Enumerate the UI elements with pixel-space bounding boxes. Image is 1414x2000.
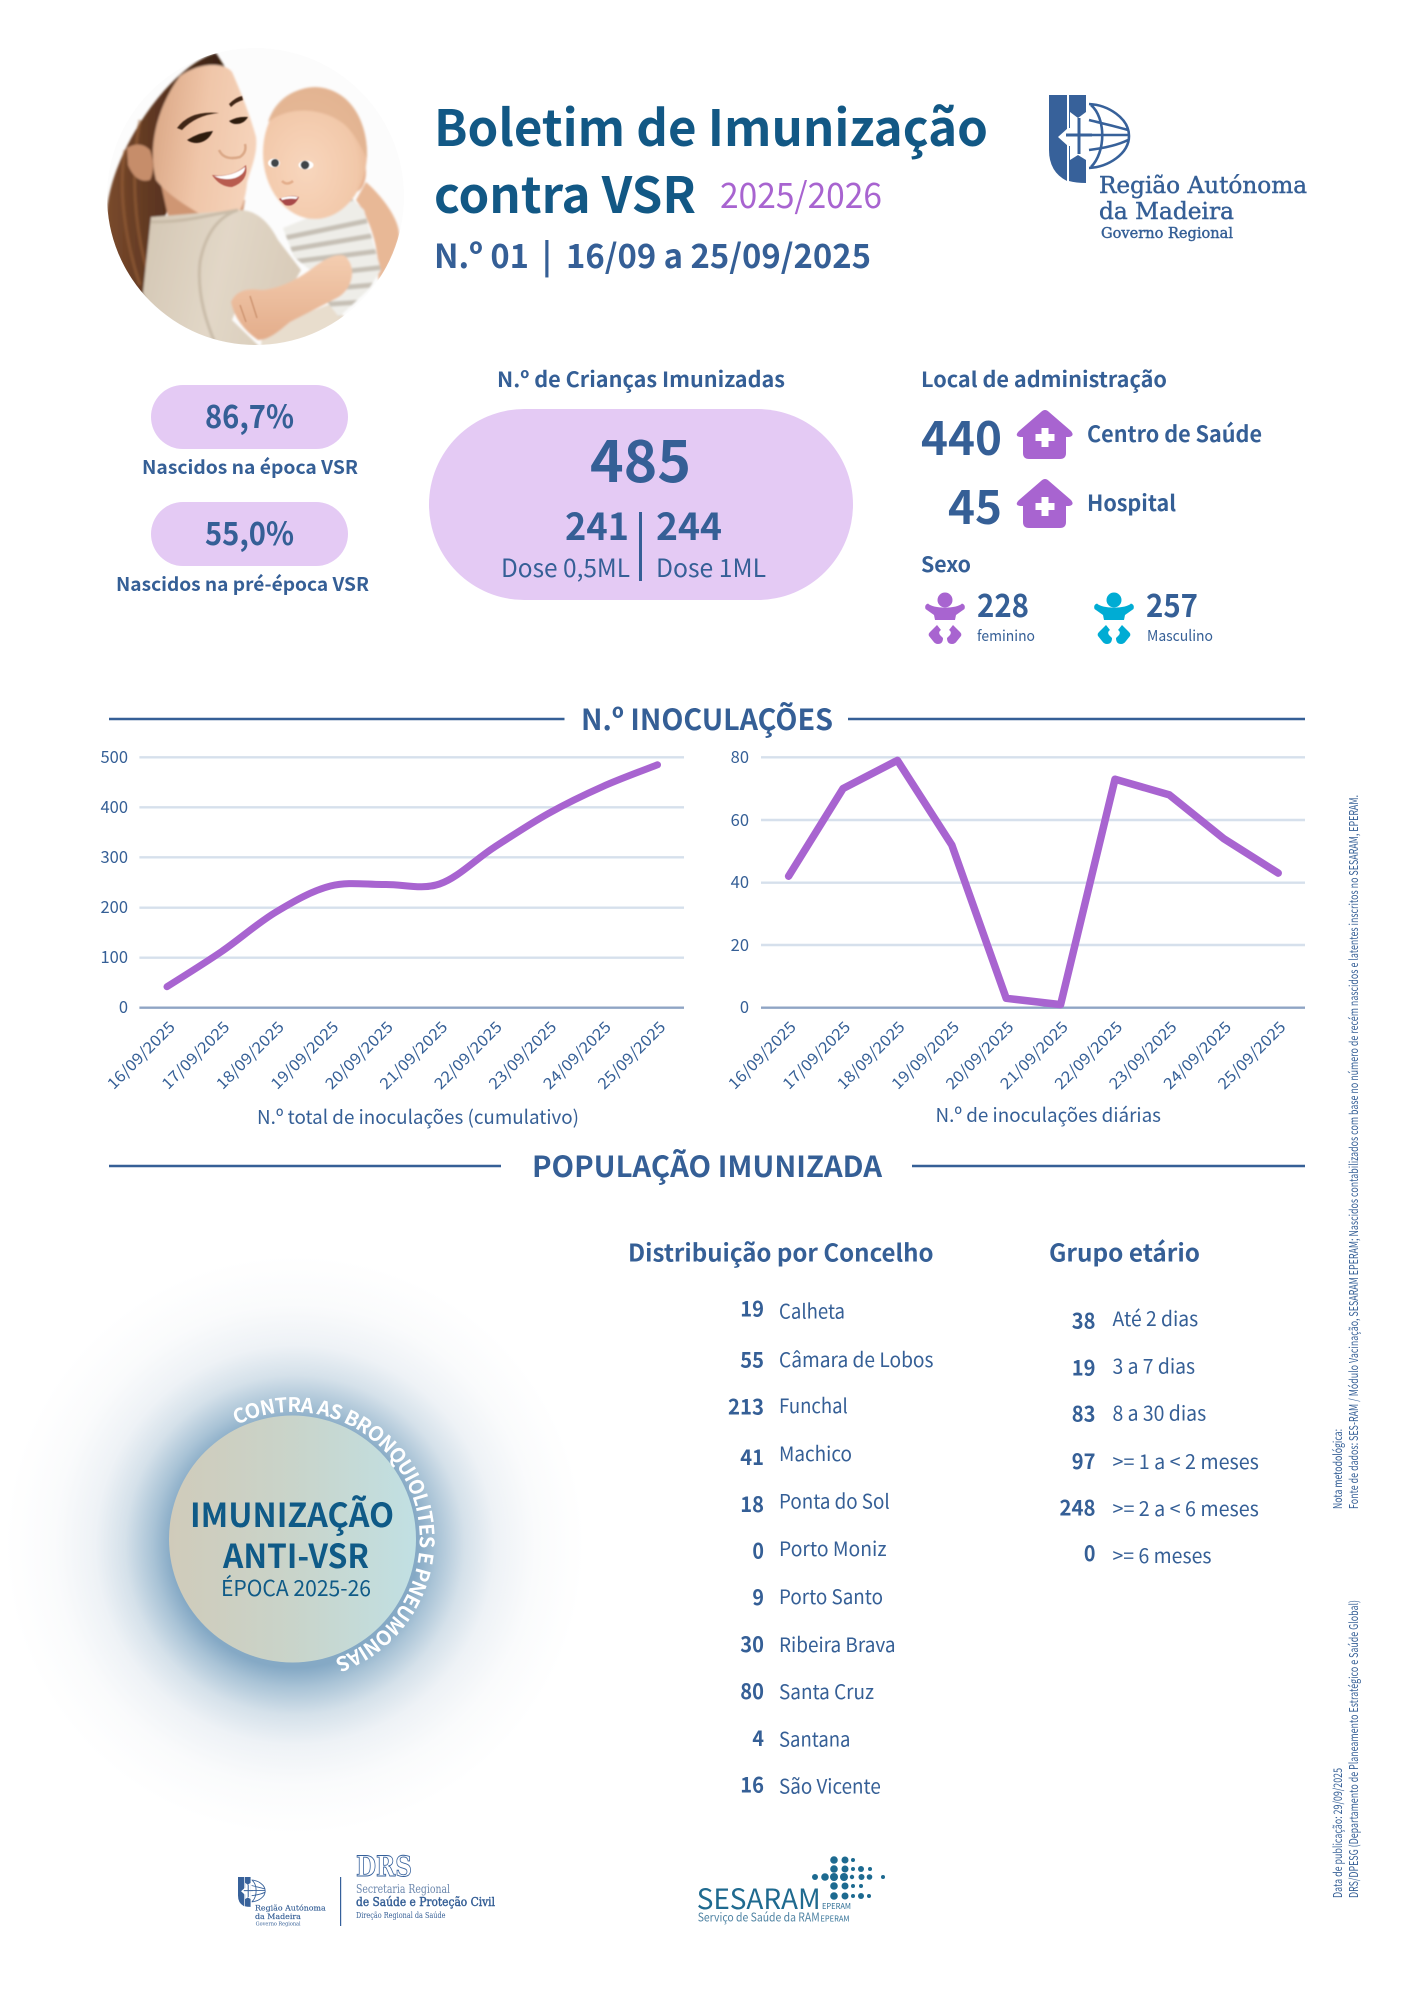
line chart: diárias: 60 [731, 807, 749, 831]
side note: publicação: DRS/DPESG (Departamento de Planeamento Estratégico e Saúde Global) [1345, 1600, 1362, 1898]
icon: centro de saúde [1017, 410, 1073, 459]
line chart: cumulativo: 20/09/2025 [320, 1016, 398, 1094]
panel: local de administração: 45 [948, 469, 1002, 538]
line chart: diárias: 20 [731, 932, 749, 956]
logo: Região Autónoma da Madeira [1049, 95, 1307, 242]
line chart: cumulativo: 200 [101, 894, 128, 918]
line chart: cumulativo: 22/09/2025 [429, 1016, 507, 1094]
footer logo: SESARAM: Serviço de Saúde da RAM [698, 1909, 820, 1926]
panel: distribuição por concelho: 30 [740, 1628, 764, 1659]
badge: imunização anti-VSR: CONTRA AS BRONQUIOLITES E PNEUMONIAS [234, 1397, 435, 1672]
panel: distribuição por concelho: Machico [779, 1438, 852, 1467]
panel: grupo etário: 38 [1072, 1305, 1096, 1336]
badge: imunização anti-VSR: ANTI-VSR [222, 1530, 369, 1578]
panel: sexo [921, 549, 1213, 646]
stat: nascidos na época VSR: 86,7% [205, 392, 294, 438]
line chart: cumulativo: 0 [119, 994, 128, 1018]
line chart: diárias: 80 [731, 744, 749, 768]
icon: bebé masculino [1094, 592, 1134, 644]
line chart: diárias: 20/09/2025 [940, 1016, 1018, 1094]
line chart: cumulativo: 25/09/2025 [592, 1016, 670, 1094]
icon: hospital [1017, 479, 1073, 528]
line chart: diárias: 19/09/2025 [886, 1016, 964, 1094]
line chart: diárias: 40 [731, 869, 749, 893]
panel: grupo etário: >= 1 a < 2 meses [1112, 1446, 1259, 1475]
mother and baby face details [177, 96, 314, 322]
title: | [542, 230, 552, 278]
panel: sexo: Sexo [921, 549, 971, 579]
panel: distribuição por concelho: 55 [740, 1344, 764, 1374]
panel: distribuição por concelho: São Vicente [779, 1770, 881, 1799]
panel: sexo: 257 [1146, 581, 1198, 627]
panel: sexo: Masculino [1147, 625, 1213, 646]
panel: distribuição por concelho: Santa Cruz [779, 1676, 874, 1705]
footer logo: DRS Secretaria Regional [340, 1850, 495, 1926]
footer logo: DRS Secretaria Regional: de Saúde e Proteção Civil [356, 1895, 495, 1909]
panel: distribuição por concelho: 4 [752, 1722, 764, 1753]
panel: distribuição por concelho: Câmara de Lobos [779, 1344, 934, 1373]
panel: distribuição por concelho [628, 1234, 934, 1800]
title: 16/09 a 25/09/2025 [566, 230, 871, 278]
line chart: cumulativo: 300 [101, 844, 128, 868]
panel: distribuição por concelho: 213 [728, 1390, 764, 1422]
panel: local de administração: Hospital [1087, 486, 1176, 518]
line chart: diárias: 17/09/2025 [777, 1016, 855, 1094]
panel: grupo etário: >= 2 a < 6 meses [1112, 1493, 1259, 1522]
panel: grupo etário: 3 a 7 dias [1112, 1350, 1195, 1379]
heading: N.º inoculações: N.º INOCULAÇÕES [581, 697, 833, 739]
footer logo: SESARAM: EPERAM [820, 1914, 850, 1925]
panel: distribuição por concelho: 80 [740, 1675, 764, 1706]
line chart: cumulativo: 24/09/2025 [538, 1016, 616, 1094]
line chart: cumulativo: 17/09/2025 [156, 1016, 234, 1094]
panel: grupo etário: 0 [1084, 1537, 1096, 1568]
panel: crianças imunizadas: 244 [656, 496, 722, 551]
line chart: diárias: 21/09/2025 [995, 1016, 1073, 1094]
title: N.º 01 [434, 230, 529, 278]
line chart: diárias: N.º de inoculações diárias [936, 1101, 1161, 1128]
title [434, 89, 988, 278]
panel: distribuição por concelho: Porto Santo [779, 1581, 883, 1610]
panel: grupo etário: Grupo etário [1049, 1234, 1200, 1268]
line chart: diárias: 24/09/2025 [1158, 1016, 1236, 1094]
footer logo: SESARAM: SESARAM [697, 1878, 821, 1918]
panel: distribuição por concelho: Funchal [779, 1390, 848, 1419]
badge: imunização anti-VSR: IMUNIZAÇÃO [190, 1489, 394, 1537]
panel: local de administração [921, 364, 1262, 538]
line chart: cumulativo: 19/09/2025 [265, 1016, 343, 1094]
line chart: diárias: 22/09/2025 [1049, 1016, 1127, 1094]
line chart: diárias [723, 744, 1305, 1128]
panel: local de administração: 440 [921, 400, 1002, 469]
stat: nascidos na pré-época VSR [116, 502, 369, 597]
panel: crianças imunizadas: Dose 0,5ML [501, 549, 630, 585]
side note: publicação: Data de publicação: 29/09/2025 [1329, 1768, 1346, 1898]
footer logo: SESARAM [697, 1856, 885, 1926]
panel: sexo: 228 [977, 581, 1029, 627]
panel: sexo: feminino [977, 625, 1035, 646]
panel: distribuição por concelho: Ponta do Sol [779, 1486, 890, 1515]
line chart: diárias: 16/09/2025 [723, 1016, 801, 1094]
line chart: cumulativo: 100 [101, 944, 128, 968]
panel: distribuição por concelho: Ribeira Brava [779, 1629, 896, 1658]
panel: crianças imunizadas: 241 [565, 496, 629, 551]
panel: grupo etário: 19 [1072, 1351, 1096, 1382]
line chart: diárias: 25/09/2025 [1212, 1016, 1290, 1094]
line chart: cumulativo: 21/09/2025 [374, 1016, 452, 1094]
line chart: cumulativo: 500 [101, 744, 128, 768]
panel: distribuição por concelho: Porto Moniz [779, 1533, 886, 1562]
panel: distribuição por concelho: 16 [740, 1768, 764, 1800]
footer logo: Região Autónoma da Madeira: Região Autónoma [255, 1903, 326, 1912]
line chart: diárias: 18/09/2025 [832, 1016, 909, 1094]
logo: Região Autónoma da Madeira: Região Autónoma [1099, 173, 1307, 199]
badge: imunização anti-VSR: ÉPOCA 2025-26 [221, 1571, 371, 1603]
logo: Região Autónoma da Madeira: da Madeira [1099, 199, 1234, 225]
side note: metodologia [1329, 795, 1362, 1509]
panel: grupo etário: 83 [1072, 1398, 1096, 1429]
panel: grupo etário: 248 [1060, 1491, 1096, 1522]
icon: SESARAM dots [812, 1856, 885, 1900]
panel: distribuição por concelho: Calheta [779, 1296, 845, 1324]
title: 2025/2026 [720, 168, 882, 219]
panel: grupo etário: Até 2 dias [1112, 1303, 1198, 1332]
line chart: diárias: 0 [740, 994, 749, 1018]
heading: população imunizada: POPULAÇÃO IMUNIZADA [532, 1144, 882, 1186]
panel: crianças imunizadas: N.º de Crianças Imunizadas [497, 364, 785, 394]
panel: local de administração: Local de administração [921, 364, 1167, 394]
line chart: cumulativo [101, 744, 684, 1130]
logo: Região Autónoma da Madeira: Governo Regional [1101, 224, 1233, 242]
line chart: cumulativo: N.º total de inoculações (cumulativo) [257, 1103, 579, 1130]
footer logo: Região Autónoma da Madeira: da Madeira [255, 1912, 301, 1921]
stat: nascidos na época VSR [142, 385, 358, 480]
panel: grupo etário [1049, 1234, 1259, 1569]
line chart: cumulativo: 16/09/2025 [102, 1016, 180, 1094]
badge: imunização anti-VSR [65, 1315, 526, 1776]
panel: distribuição por concelho: 0 [752, 1534, 764, 1566]
stat: nascidos na pré-época VSR: Nascidos na pré-época VSR [116, 570, 369, 597]
panel: distribuição por concelho: Santana [779, 1724, 850, 1753]
side note: publicação [1329, 1600, 1362, 1898]
panel: distribuição por concelho: 41 [740, 1441, 764, 1472]
line chart: cumulativo: 18/09/2025 [211, 1016, 289, 1094]
footer logo: DRS Secretaria Regional: Direção Regional da Saúde [356, 1911, 446, 1920]
panel: local de administração: Centro de Saúde [1087, 417, 1262, 449]
panel: distribuição por concelho: 9 [752, 1581, 764, 1612]
footer logo: DRS Secretaria Regional: Secretaria Regional [356, 1882, 450, 1896]
panel: distribuição por concelho: 19 [740, 1292, 764, 1324]
panel: crianças imunizadas [429, 364, 853, 600]
footer logo: DRS Secretaria Regional: DRS [356, 1850, 412, 1883]
panel: distribuição por concelho: 18 [740, 1488, 764, 1519]
panel: crianças imunizadas: 485 [590, 415, 691, 499]
panel: grupo etário: 8 a 30 dias [1112, 1398, 1206, 1426]
footer logo: Região Autónoma da Madeira [238, 1877, 326, 1928]
photo: mother holding baby [107, 53, 400, 345]
side note: metodologia: Fonte de dados: SES-RAM / Módulo Vacinação, SESARAM EPERAM; Nascidos contabilizados com base no número de recém nascidos e latentes inscritos no SESARAM, EPERAM. [1345, 795, 1362, 1509]
footer logo: Região Autónoma da Madeira: Governo Regional [256, 1922, 301, 1928]
line chart: cumulativo: 23/09/2025 [483, 1016, 561, 1094]
stat: nascidos na época VSR: Nascidos na época VSR [142, 453, 358, 480]
side note: metodologia: Nota metodológica: [1329, 1429, 1346, 1509]
title: contra VSR [434, 156, 696, 228]
footer logo: SESARAM: EPERAM [822, 1901, 851, 1912]
icon: bebé feminino [925, 592, 965, 644]
panel: grupo etário: >= 6 meses [1112, 1540, 1212, 1569]
line chart: cumulativo: 400 [101, 794, 128, 818]
line chart: diárias: 23/09/2025 [1104, 1016, 1181, 1094]
panel: crianças imunizadas: Dose 1ML [656, 549, 766, 585]
panel: distribuição por concelho: Distribuição por Concelho [628, 1234, 934, 1268]
stat: nascidos na pré-época VSR: 55,0% [205, 509, 294, 555]
panel: grupo etário: 97 [1072, 1445, 1096, 1476]
title: Boletim de Imunização [434, 89, 988, 161]
